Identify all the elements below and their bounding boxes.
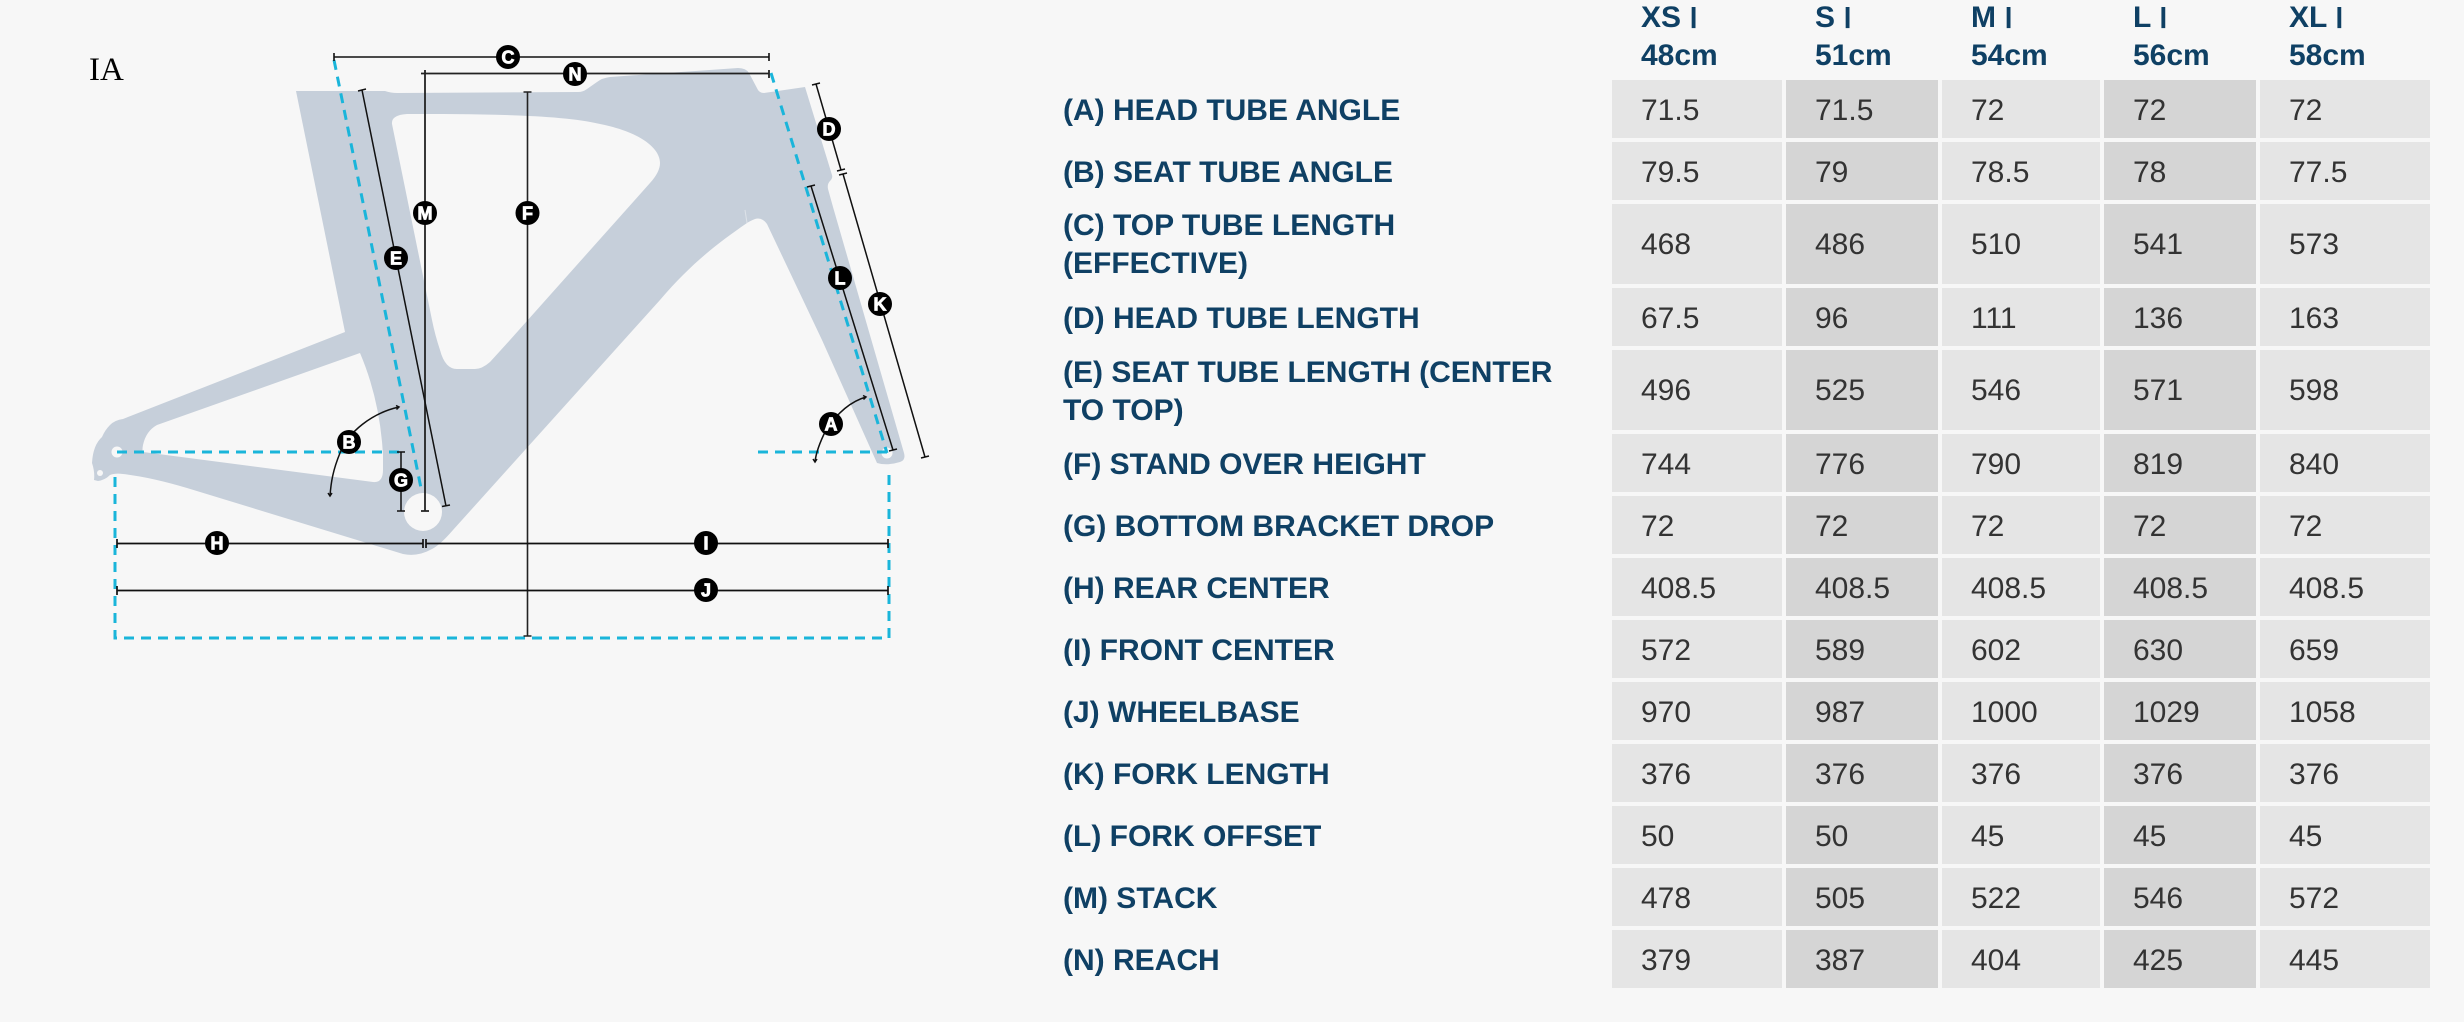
- row A: head tube angle: 72: [2133, 94, 2166, 126]
- row L: fork offset: 45: [2133, 820, 2166, 852]
- row H: rear center: 408.5: [1971, 572, 2046, 604]
- label: (G) BOTTOM BRACKET DROP: [1063, 510, 1494, 542]
- badge F: [516, 201, 540, 225]
- row K: fork length: [1063, 744, 2430, 802]
- size M: M: [1971, 1, 1996, 34]
- row K: fork length: 376: [2289, 758, 2339, 790]
- row C: top tube length: 486: [1815, 228, 1865, 261]
- size XL: 58cm: [2289, 39, 2366, 72]
- badge I: [694, 531, 718, 555]
- size XS: 48cm: [1641, 39, 1718, 72]
- badge M: M: [418, 204, 432, 224]
- row G: bottom bracket drop: 72: [2133, 510, 2166, 542]
- size XS: |: [1689, 4, 1698, 28]
- label: (F) STAND OVER HEIGHT: [1063, 448, 1426, 480]
- badge K: K: [874, 294, 886, 314]
- size M: 54cm: [1971, 39, 2048, 72]
- row M: stack: [1063, 868, 2430, 926]
- label: (C) TOP TUBE LENGTH: [1063, 208, 1395, 242]
- row B: seat tube angle: [1063, 142, 2430, 200]
- label: (A) HEAD TUBE ANGLE: [1063, 94, 1400, 126]
- row I: front center: 589: [1815, 634, 1865, 666]
- dimension C: top tube length: [334, 53, 769, 61]
- row M: stack: 478: [1641, 882, 1691, 914]
- row M: stack: 572: [2289, 882, 2339, 914]
- row A: head tube angle: [1063, 80, 2430, 138]
- row G: bottom bracket drop: [1063, 496, 2430, 554]
- row M: stack: 522: [1971, 882, 2021, 914]
- size XL: |: [2335, 4, 2344, 28]
- dimension I: front center: [426, 539, 888, 548]
- row H: rear center: 408.5: [2289, 572, 2364, 604]
- row L: fork offset: 45: [2289, 820, 2322, 852]
- row G: bottom bracket drop: 72: [2289, 510, 2322, 542]
- row G: bottom bracket drop: 72: [1971, 510, 2004, 542]
- row D: head tube length: 136: [2133, 302, 2183, 334]
- row E: seat tube length: 496: [1641, 374, 1691, 407]
- row J: wheelbase: 1058: [2289, 696, 2356, 728]
- row A: head tube angle: 71.5: [1641, 94, 1699, 126]
- row E: seat tube length: 571: [2133, 374, 2183, 407]
- row A: head tube angle: 71.5: [1815, 94, 1873, 126]
- row N: reach: 404: [1971, 944, 2021, 976]
- bike frame silhouette: [92, 68, 904, 555]
- label: (I) FRONT CENTER: [1063, 634, 1335, 666]
- badge L: [828, 266, 852, 290]
- size L: 56cm: [2133, 39, 2210, 72]
- badge C: [496, 45, 520, 69]
- row K: fork length: 376: [1641, 758, 1691, 790]
- row G: bottom bracket drop: 72: [1815, 510, 1848, 542]
- row M: stack: 505: [1815, 882, 1865, 914]
- label: (M) STACK: [1063, 882, 1217, 914]
- row A: head tube angle: 72: [2289, 94, 2322, 126]
- dimension G: bottom bracket drop: [397, 452, 405, 511]
- row G: bottom bracket drop: 72: [1641, 510, 1674, 542]
- panel: frame geometry diagram: [89, 45, 930, 640]
- row M: stack: 546: [2133, 882, 2183, 914]
- row H: rear center: [1063, 558, 2430, 616]
- row D: head tube length: [1063, 288, 2430, 346]
- size L: |: [2159, 4, 2168, 28]
- dimension E: seat tube length: [358, 89, 450, 506]
- size S: 51cm: [1815, 39, 1892, 72]
- row E: seat tube length: 525: [1815, 374, 1865, 407]
- badge G: [389, 468, 413, 492]
- row J: wheelbase: 970: [1641, 696, 1691, 728]
- badge F: F: [522, 204, 533, 224]
- row N: reach: 379: [1641, 944, 1691, 976]
- row C: top tube length: [1063, 204, 2430, 284]
- dimension L: fork offset: [807, 185, 897, 451]
- row F: stand over height: [1063, 434, 2430, 492]
- row B: seat tube angle: 77.5: [2289, 156, 2347, 188]
- badge E: [384, 246, 408, 270]
- row B: seat tube angle: 79.5: [1641, 156, 1699, 188]
- size M: [1971, 1, 2048, 72]
- label: (L) FORK OFFSET: [1063, 820, 1321, 852]
- row J: wheelbase: 987: [1815, 696, 1865, 728]
- row C: top tube length: 468: [1641, 228, 1691, 261]
- size L: [2133, 1, 2210, 72]
- badge M: [413, 201, 437, 225]
- size S: S: [1815, 1, 1835, 34]
- dimension F: stand over height: [524, 92, 532, 636]
- row A: head tube angle: 72: [1971, 94, 2004, 126]
- size L: L: [2133, 1, 2151, 34]
- badge N: [563, 62, 587, 86]
- size XS: [1641, 1, 1718, 72]
- label: [1063, 208, 1395, 280]
- row K: fork length: 376: [2133, 758, 2183, 790]
- dimension M: stack: [421, 70, 429, 511]
- size XL: [2289, 1, 2366, 72]
- badge B: [337, 430, 361, 454]
- row C: top tube length: 541: [2133, 228, 2183, 261]
- row D: head tube length: 96: [1815, 302, 1848, 334]
- row K: fork length: 376: [1815, 758, 1865, 790]
- label: (E) SEAT TUBE LENGTH (CENTER: [1063, 356, 1552, 388]
- row D: head tube length: 67.5: [1641, 302, 1699, 334]
- badge G: G: [394, 470, 408, 490]
- row N: reach: [1063, 930, 2430, 988]
- angle arc A: head tube angle: [813, 396, 866, 462]
- badge A: A: [824, 414, 838, 434]
- size M: |: [2004, 4, 2013, 28]
- row F: stand over height: 840: [2289, 448, 2339, 480]
- label: (D) HEAD TUBE LENGTH: [1063, 302, 1420, 334]
- row E: seat tube length: 546: [1971, 374, 2021, 407]
- badge D: [817, 117, 841, 141]
- row C: top tube length: 573: [2289, 228, 2339, 261]
- row H: rear center: 408.5: [2133, 572, 2208, 604]
- badge H: H: [210, 534, 224, 554]
- row K: fork length: 376: [1971, 758, 2021, 790]
- label: [1063, 356, 1552, 426]
- badge N: N: [568, 64, 582, 84]
- badge J: [694, 578, 718, 602]
- label: (N) REACH: [1063, 944, 1220, 976]
- badge H: [205, 531, 229, 555]
- row L: fork offset: 50: [1815, 820, 1848, 852]
- cyan dashed reference lines: [115, 60, 889, 638]
- label: (EFFECTIVE): [1063, 246, 1248, 280]
- badge C: C: [502, 48, 514, 68]
- badge E: E: [390, 248, 402, 268]
- dimension K: fork length: [839, 173, 929, 458]
- size S: [1815, 1, 1892, 72]
- row F: stand over height: 819: [2133, 448, 2183, 480]
- row F: stand over height: 790: [1971, 448, 2021, 480]
- row N: reach: 425: [2133, 944, 2183, 976]
- row I: front center: 572: [1641, 634, 1691, 666]
- badge D: D: [822, 120, 836, 140]
- row N: reach: 445: [2289, 944, 2339, 976]
- model name: IA: [89, 52, 124, 88]
- badge K: [868, 292, 892, 316]
- row L: fork offset: 50: [1641, 820, 1674, 852]
- row J: wheelbase: [1063, 682, 2430, 740]
- dimension D: head tube length: [812, 83, 845, 171]
- badge I: I: [703, 534, 709, 554]
- label: (H) REAR CENTER: [1063, 572, 1330, 604]
- row I: front center: 602: [1971, 634, 2021, 666]
- dimension H: rear center: [117, 539, 423, 548]
- row J: wheelbase: 1000: [1971, 696, 2038, 728]
- badge J: J: [701, 580, 711, 600]
- row C: top tube length: 510: [1971, 228, 2021, 261]
- label: (K) FORK LENGTH: [1063, 758, 1330, 790]
- badge L: L: [834, 268, 846, 288]
- size XL: XL: [2289, 1, 2327, 34]
- row H: rear center: 408.5: [1641, 572, 1716, 604]
- angle arc B: seat tube angle: [328, 406, 399, 496]
- row D: head tube length: 111: [1971, 302, 2017, 334]
- row L: fork offset: [1063, 806, 2430, 864]
- row B: seat tube angle: 79: [1815, 156, 1848, 188]
- row E: seat tube length: 598: [2289, 374, 2339, 407]
- row J: wheelbase: 1029: [2133, 696, 2200, 728]
- row B: seat tube angle: 78.5: [1971, 156, 2029, 188]
- row I: front center: [1063, 620, 2430, 678]
- size S: |: [1843, 4, 1852, 28]
- badge B: B: [342, 432, 356, 452]
- row I: front center: 659: [2289, 634, 2339, 666]
- table header: frame sizes: [1641, 1, 2366, 72]
- row E: seat tube length: [1063, 350, 2430, 430]
- dimension J: wheelbase: [117, 586, 888, 595]
- label: (B) SEAT TUBE ANGLE: [1063, 156, 1393, 188]
- label: TO TOP): [1063, 394, 1184, 426]
- row F: stand over height: 744: [1641, 448, 1691, 480]
- badge A: [819, 412, 843, 436]
- row I: front center: 630: [2133, 634, 2183, 666]
- row B: seat tube angle: 78: [2133, 156, 2166, 188]
- row N: reach: 387: [1815, 944, 1865, 976]
- row H: rear center: 408.5: [1815, 572, 1890, 604]
- row D: head tube length: 163: [2289, 302, 2339, 334]
- label: (J) WHEELBASE: [1063, 696, 1300, 728]
- size XS: XS: [1641, 1, 1681, 34]
- dimension N: reach: [421, 70, 769, 78]
- row L: fork offset: 45: [1971, 820, 2004, 852]
- row F: stand over height: 776: [1815, 448, 1865, 480]
